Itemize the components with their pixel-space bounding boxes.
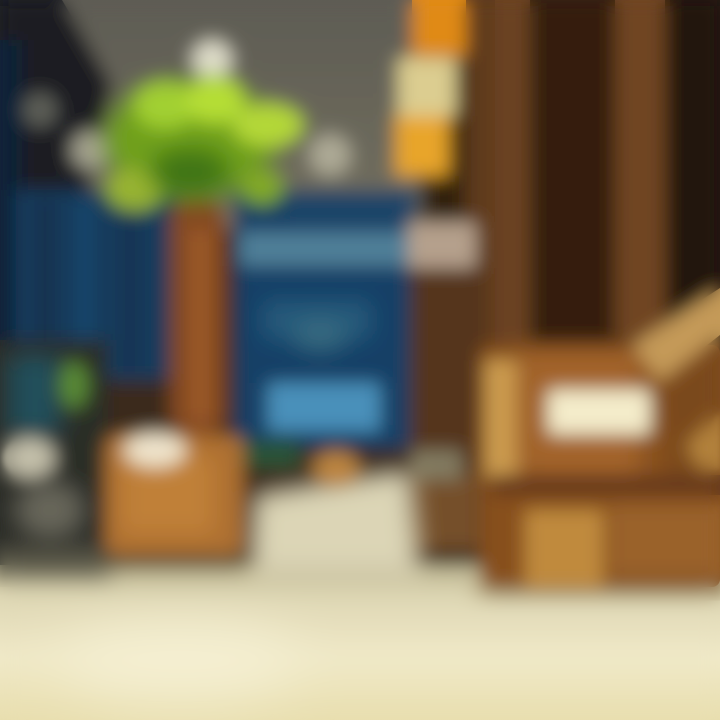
left blue panel xyxy=(15,190,175,380)
floor xyxy=(0,470,720,720)
plant: foliage xyxy=(104,76,304,212)
small orange object xyxy=(240,440,360,486)
right wooden stripes xyxy=(410,0,720,550)
planter box: left xyxy=(105,432,245,568)
wooden crate: right xyxy=(480,288,720,596)
lower left dark zone xyxy=(0,340,108,565)
wall highlights xyxy=(192,40,351,176)
center blue sign xyxy=(235,190,415,448)
left dark column xyxy=(0,0,112,360)
hanging orange and cream blocks xyxy=(395,0,476,268)
plant: trunk xyxy=(170,200,225,435)
